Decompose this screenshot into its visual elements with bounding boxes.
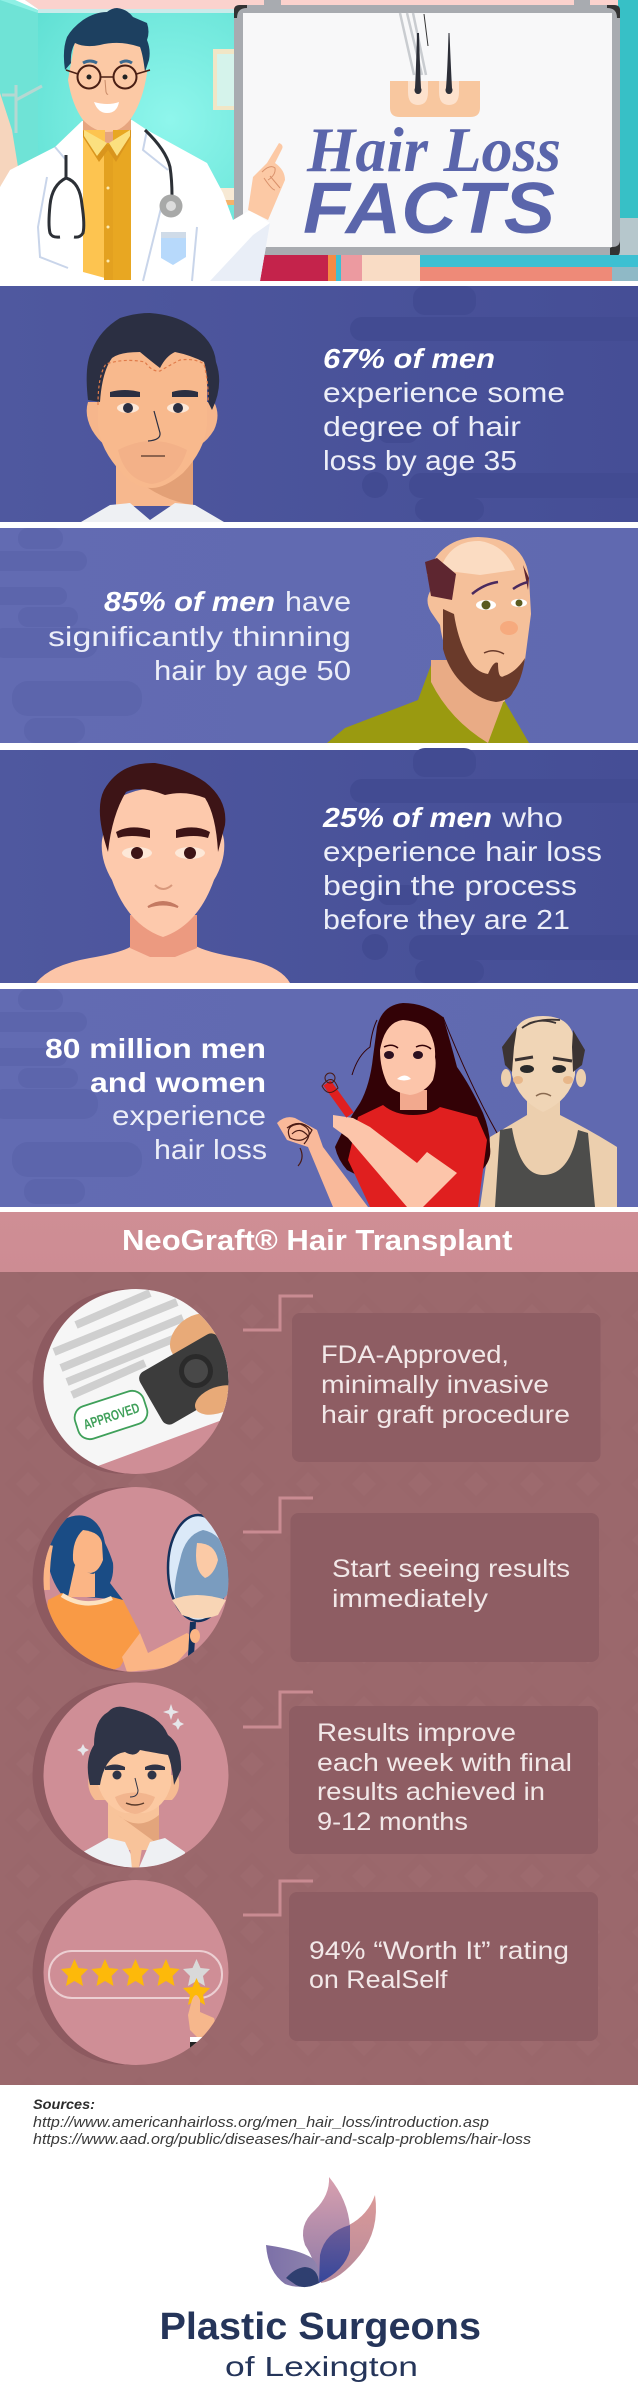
- text: 85% of men: 85% of men: [104, 586, 275, 617]
- text: 25% of men: experience hair loss: [323, 836, 602, 867]
- illustration: man with hairline: [81, 313, 224, 522]
- item: RealSelf rating: [32, 1880, 598, 2065]
- panel: NeoGraft body: [0, 1212, 638, 2085]
- heading band: NeoGraft® Hair Transplant: [122, 1225, 513, 1257]
- text box: 9-12 months: [317, 1808, 468, 1836]
- connector: [243, 1881, 313, 1915]
- text: 67% of men: 67% of men: [323, 343, 495, 374]
- panel: 80 million: [0, 989, 638, 1207]
- text box: [289, 1706, 598, 1854]
- icon: man with restored hair: [32, 1682, 228, 1880]
- sources: http://www.americanhairloss.org/men_hair_loss/introduction.asp: [33, 2115, 489, 2131]
- sources: https://www.aad.org/public/diseases/hair-and-scalp-problems/hair-loss: [33, 2132, 531, 2148]
- text box: results achieved in: [317, 1778, 545, 1806]
- heading band: [0, 1212, 638, 1272]
- item: FDA approved: [20, 1280, 600, 1480]
- title: [303, 115, 561, 249]
- text: 80 million: and women: [90, 1067, 266, 1098]
- whiteboard: [234, 0, 620, 255]
- hand: [248, 143, 285, 220]
- text: 67% of men: [323, 343, 565, 476]
- icon: hair follicle diagram: [390, 13, 480, 117]
- logo: Plastic Surgeons of Lexington: [160, 2177, 481, 2382]
- panel: 25% of men: [0, 748, 638, 983]
- text: 85% of men: significantly thinning: [48, 621, 351, 652]
- text box: on RealSelf: [309, 1966, 448, 1994]
- text: 80 million: experience: [112, 1100, 266, 1131]
- icon: butterfly logo: [266, 2177, 376, 2287]
- text: 80 million: hair loss: [154, 1134, 267, 1165]
- text: 80 million: [45, 1033, 267, 1165]
- illustration: doctor: [0, 8, 285, 281]
- shirt: [83, 130, 105, 272]
- text box: hair graft procedure: [321, 1401, 570, 1429]
- text box: each week with final: [317, 1749, 572, 1777]
- illustration: man and woman with hair loss: [277, 1003, 617, 1207]
- icon: approval document: [32, 1289, 228, 1474]
- face: [68, 40, 147, 132]
- title: FACTS: [303, 169, 555, 249]
- text: 25% of men: who: [501, 802, 563, 833]
- sources: Sources:: [33, 2096, 95, 2112]
- text: 85% of men: [48, 586, 351, 686]
- icon: woman with mirror: [32, 1487, 232, 1680]
- text box: Start seeing results: [332, 1555, 570, 1583]
- text box: FDA-Approved,: [321, 1341, 509, 1369]
- text: 67% of men: experience some: [323, 377, 565, 408]
- neck: [83, 112, 131, 165]
- wordmark: of Lexington: [225, 2351, 418, 2382]
- connector: [243, 1498, 313, 1532]
- item: immediate results: [32, 1487, 599, 1680]
- text box: Results improve: [317, 1719, 516, 1747]
- panel: 67% of men: [0, 286, 638, 522]
- text: 67% of men: loss by age 35: [323, 445, 517, 476]
- header illustration: [0, 0, 638, 281]
- hair: [64, 8, 150, 72]
- icon: approval document: APPROVED: [81, 1399, 141, 1433]
- text: 25% of men: [322, 802, 602, 935]
- text: 25% of men: before they are 21: [323, 904, 570, 935]
- man: [480, 1115, 617, 1207]
- text: 80 million: 80 million men: [45, 1033, 266, 1064]
- wordmark: [160, 2306, 481, 2382]
- text: 85% of men: have: [285, 586, 351, 617]
- pocket: [161, 232, 186, 265]
- text box: minimally invasive: [321, 1371, 549, 1399]
- clinic background: [0, 0, 638, 281]
- wordmark: Plastic Surgeons: [160, 2306, 481, 2348]
- illustration: young man with thick hair: [36, 763, 290, 983]
- woman: [335, 1003, 490, 1207]
- icon: star rating: [32, 1880, 228, 2065]
- text box: 94% “Worth It” rating: [309, 1937, 569, 1965]
- text: 25% of men: 25% of men: [322, 802, 492, 833]
- text box: immediately: [332, 1585, 489, 1613]
- text: 67% of men: degree of hair: [323, 411, 521, 442]
- sources: [33, 2096, 531, 2148]
- coat: [0, 120, 270, 281]
- title: Hair Loss: [306, 115, 561, 185]
- connector: [243, 1296, 313, 1330]
- text box: [289, 1892, 598, 2041]
- stethoscope: [145, 130, 172, 196]
- text: 25% of men: begin the process: [323, 870, 577, 901]
- text: 85% of men: hair by age 50: [154, 655, 351, 686]
- panel: 85% of men: [0, 528, 638, 743]
- text box: [292, 1313, 600, 1462]
- text box: [290, 1513, 599, 1662]
- connector: [243, 1692, 313, 1727]
- illustration: balding man with beard: [327, 537, 531, 743]
- item: results improve: [32, 1682, 598, 1880]
